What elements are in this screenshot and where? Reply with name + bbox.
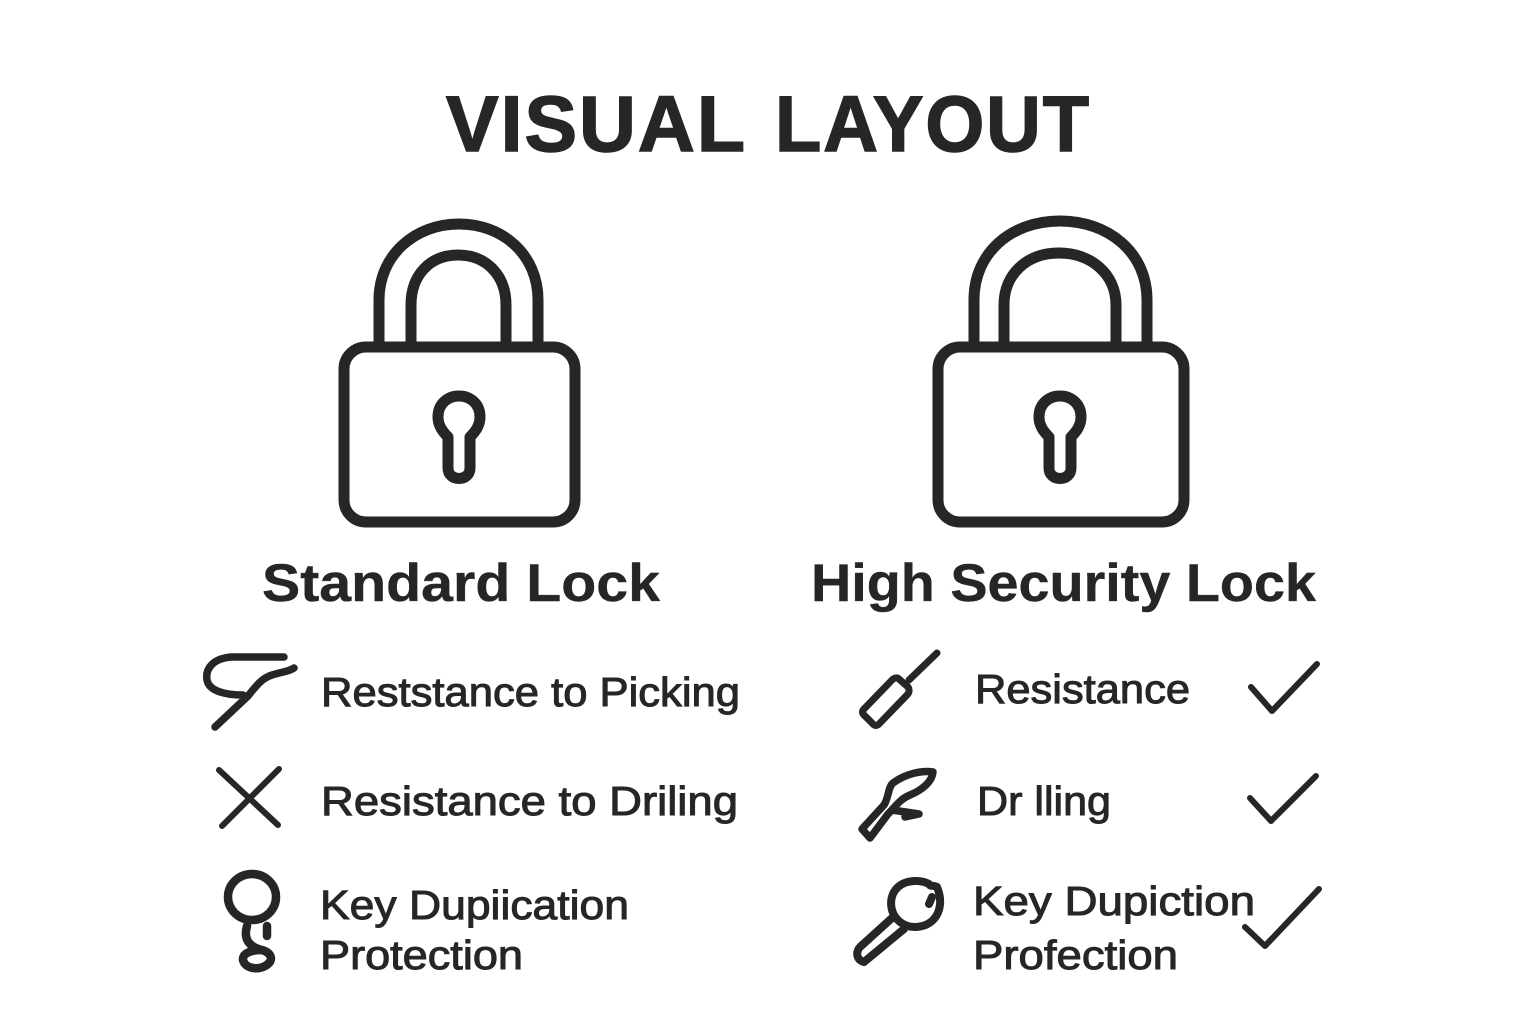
icon: check mark [1245,889,1319,946]
row: key duplication protection [228,874,629,978]
label: drilling: Dr lling [977,778,1111,824]
panel: standard lock [207,224,740,978]
heading: standard lock: Standard Lock [262,554,661,613]
row: drilling [862,771,1316,838]
icon: key ring [228,874,276,968]
title: LAYOUT [775,79,1091,168]
label: key duplication protection: Key Dupiication [320,882,629,928]
icon: key [857,881,940,962]
icon: drill [862,771,933,838]
row: resistance to drilling [219,769,738,826]
row: resistance [862,653,1317,726]
panel: high security lock [811,221,1319,978]
icon: screwdriver [862,653,937,726]
label: key duplication protection [320,882,629,978]
label: key duplication protection: Key Dupiction [973,878,1255,924]
label: key duplication protection [973,878,1255,978]
icon: standard padlock [344,224,575,522]
label: key duplication protection: Protection [320,932,523,978]
icon: lock pick [207,657,294,727]
row: key duplication protection [857,878,1319,978]
icon: check mark [1250,776,1316,821]
label: resistance: Resistance [975,666,1190,712]
label: key duplication protection: Profection [973,932,1178,978]
title: VISUAL [446,79,747,168]
icon: high security padlock [938,221,1184,522]
icon: cross mark [219,769,279,826]
heading: high security lock: High Security Lock [811,554,1317,613]
label: resistance to drilling: Resistance to Driling [321,778,738,824]
title [446,79,1091,168]
row: resistance to picking [207,657,740,727]
icon: check mark [1251,664,1317,711]
label: resistance to picking: Reststance to Picking [321,669,740,715]
